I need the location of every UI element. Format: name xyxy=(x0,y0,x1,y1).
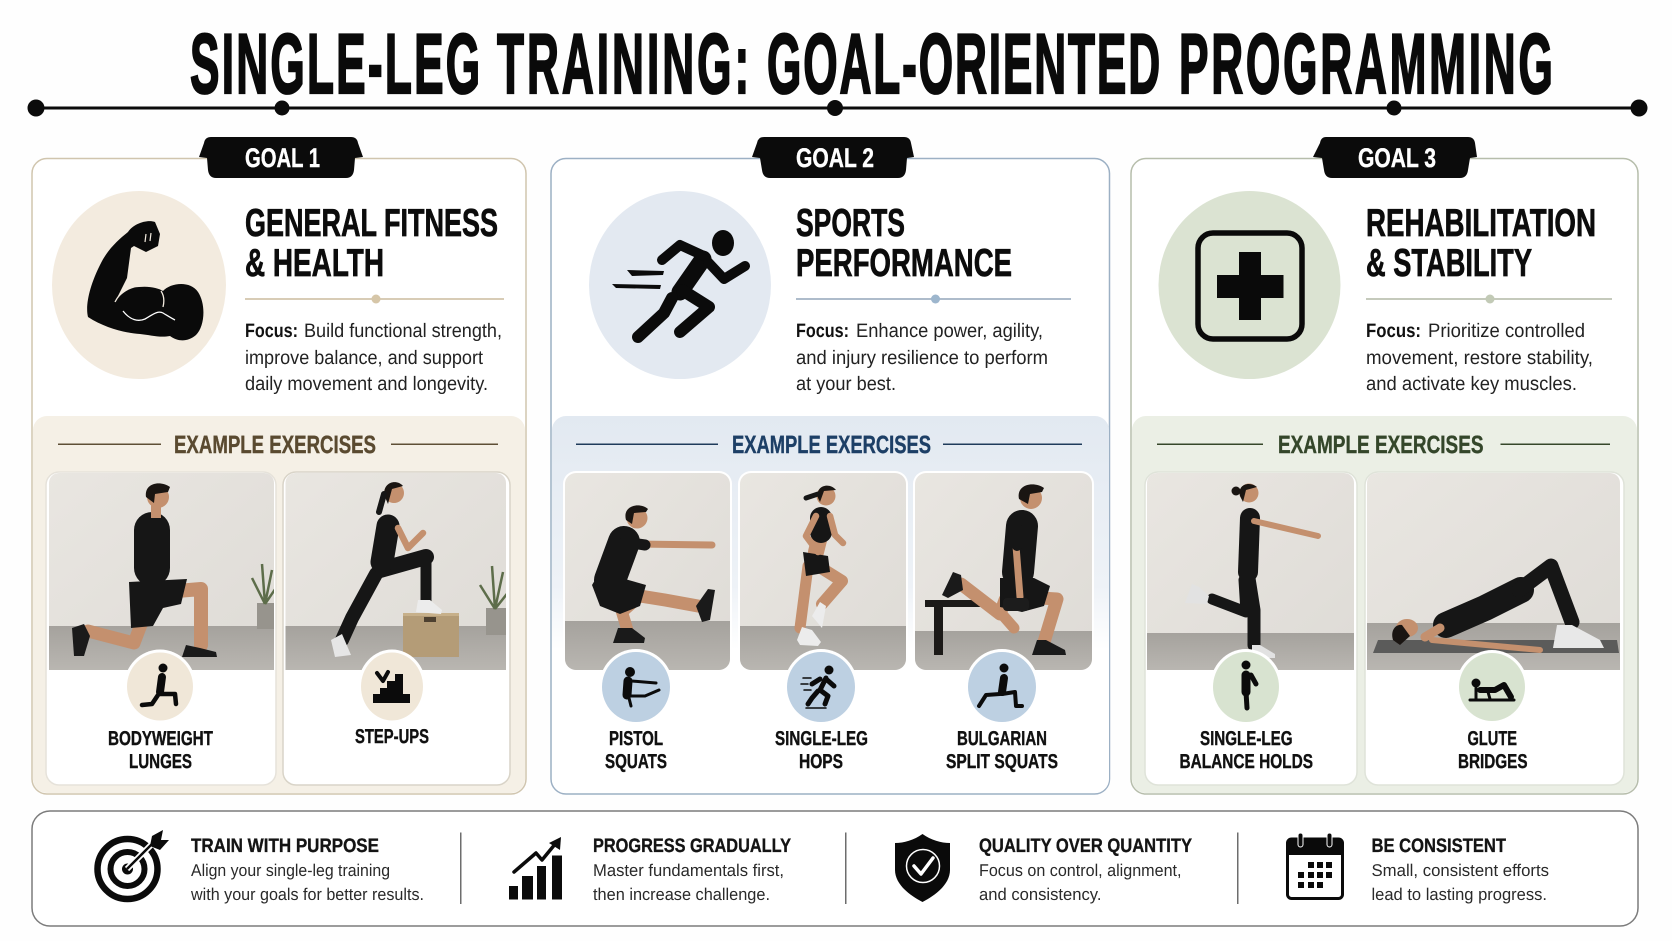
label: glute bridges: BRIDGES xyxy=(1458,751,1528,773)
photo: lunges xyxy=(49,472,278,670)
text: progress gradually: PROGRESS GRADUALLY xyxy=(593,835,791,857)
icon circle: muscle xyxy=(52,191,226,379)
focus text 1: Build functional strength, xyxy=(304,320,502,342)
heading 2: SPORTS xyxy=(796,202,905,245)
text: be consistent: lead to lasting progress. xyxy=(1372,885,1547,904)
focus text 3: movement, restore stability, xyxy=(1366,347,1593,369)
focus text 1: improve balance, and support xyxy=(245,347,484,369)
exercises background 3 xyxy=(1132,416,1637,793)
label: pistol squats xyxy=(605,728,667,773)
label: single-leg hops: SINGLE-LEG xyxy=(775,728,868,750)
goal 2 tab xyxy=(752,137,914,178)
badge: balance xyxy=(1210,649,1282,725)
photo: step-ups xyxy=(285,472,510,670)
text: train with purpose: TRAIN WITH PURPOSE xyxy=(191,835,379,857)
text: be consistent xyxy=(1372,835,1549,904)
icon circle: runner xyxy=(589,191,771,379)
divider 1 xyxy=(245,294,504,304)
badge: bridge xyxy=(1456,650,1528,724)
card: single-leg balance holds xyxy=(1145,472,1357,785)
text: progress gradually: then increase challenge. xyxy=(593,885,770,904)
label: bodyweight lunges: LUNGES xyxy=(129,751,192,773)
card: glute bridges xyxy=(1365,472,1624,785)
label: bulgarian split squats xyxy=(946,728,1058,773)
photo: hops xyxy=(740,472,906,670)
title: PROGRAMMING xyxy=(1179,17,1553,112)
example exercises heading 1: EXAMPLE EXERCISES xyxy=(174,431,376,459)
label: step-ups: STEP-UPS xyxy=(355,726,429,748)
label: bodyweight lunges xyxy=(108,728,213,773)
focus text 1: daily movement and longevity. xyxy=(245,373,488,395)
title xyxy=(190,17,1553,112)
card: step-ups xyxy=(283,472,510,785)
focus text 2: Focus: xyxy=(796,320,849,342)
heading 1: GENERAL FITNESS xyxy=(245,202,498,245)
label: bulgarian split squats: BULGARIAN xyxy=(957,728,1047,750)
label: single-leg hops xyxy=(775,728,868,773)
panel: goal 1 general fitness xyxy=(32,137,526,794)
focus text 1 xyxy=(245,320,502,395)
goal 3 tab xyxy=(1313,137,1477,178)
tip: train with purpose xyxy=(98,830,424,904)
icon: target xyxy=(98,830,169,899)
badge: bulgarian xyxy=(965,649,1039,725)
divider 2 xyxy=(796,294,1071,304)
text: quality over quantity: QUALITY OVER QUANTITY xyxy=(979,835,1192,857)
card: bulgarian split squats xyxy=(913,471,1094,773)
focus text 3: and activate key muscles. xyxy=(1366,373,1577,395)
goal 1 tab xyxy=(199,137,363,178)
focus text 2: Enhance power, agility, xyxy=(856,320,1043,342)
text: train with purpose: Align your single-leg training xyxy=(191,861,390,880)
label: glute bridges xyxy=(1458,728,1528,773)
tip: quality over quantity xyxy=(895,834,1192,904)
goal 3 tab: GOAL 3 xyxy=(1358,143,1436,173)
focus text 2: and injury resilience to perform xyxy=(796,347,1048,369)
text: quality over quantity: Focus on control, alignment, xyxy=(979,861,1182,880)
text: progress gradually xyxy=(593,835,791,904)
focus text 3: Prioritize controlled xyxy=(1428,320,1585,342)
example exercises heading 3: EXAMPLE EXERCISES xyxy=(1278,431,1484,459)
heading 1 xyxy=(245,202,498,285)
divider 3 xyxy=(1366,294,1612,304)
text: be consistent: Small, consistent efforts xyxy=(1372,861,1549,880)
heading 2: PERFORMANCE xyxy=(796,242,1012,285)
label: bodyweight lunges: BODYWEIGHT xyxy=(108,728,213,750)
icon circle: medical cross xyxy=(1158,191,1340,379)
card: bodyweight lunges xyxy=(46,472,278,785)
exercises background 1 xyxy=(33,416,525,793)
label: single-leg balance holds: SINGLE-LEG xyxy=(1200,728,1292,750)
focus text 2 xyxy=(796,320,1048,395)
text: train with purpose: with your goals for better results. xyxy=(190,885,424,904)
photo: pistol squat xyxy=(565,472,730,670)
icon: shield check xyxy=(895,834,950,902)
icon: growth chart xyxy=(509,837,562,900)
card: pistol squats xyxy=(563,471,732,773)
focus text 3 xyxy=(1366,320,1593,395)
heading 1: & HEALTH xyxy=(245,242,384,285)
heading 3 xyxy=(1366,202,1596,285)
label: glute bridges: GLUTE xyxy=(1468,728,1517,750)
heading 3: & STABILITY xyxy=(1366,242,1532,285)
text: be consistent: BE CONSISTENT xyxy=(1372,835,1506,857)
icon: calendar xyxy=(1287,833,1343,898)
tip: progress gradually xyxy=(509,835,791,904)
badge: hops xyxy=(784,649,858,725)
focus text 2: at your best. xyxy=(796,373,896,395)
label: single-leg balance holds xyxy=(1180,728,1313,773)
panel: goal 2 sports performance xyxy=(551,137,1110,794)
photo: glute bridge xyxy=(1367,472,1620,670)
goal 1 tab: GOAL 1 xyxy=(245,143,320,173)
badge: lunges xyxy=(124,650,196,724)
text: progress gradually: Master fundamentals first, xyxy=(593,861,784,880)
text: train with purpose xyxy=(190,835,424,904)
focus text 3: Focus: xyxy=(1366,320,1421,342)
goal 2 tab: GOAL 2 xyxy=(796,143,874,173)
text: quality over quantity xyxy=(979,835,1192,904)
badge: step-ups xyxy=(358,650,426,724)
photo: bulgarian xyxy=(915,472,1092,670)
panel: bottom tips xyxy=(32,811,1638,926)
label: single-leg hops: HOPS xyxy=(799,751,843,773)
title: SINGLE-LEG xyxy=(190,17,480,112)
label: pistol squats: PISTOL xyxy=(609,728,663,750)
label: bulgarian split squats: SPLIT SQUATS xyxy=(946,751,1058,773)
tip: be consistent xyxy=(1287,833,1549,904)
focus text 1: Focus: xyxy=(245,320,298,342)
photo: balance hold xyxy=(1147,472,1354,670)
title rule with dots xyxy=(28,100,1648,116)
text: quality over quantity: and consistency. xyxy=(979,885,1102,904)
title: TRAINING: xyxy=(497,17,749,112)
badge: pistol xyxy=(599,649,673,725)
panel: goal 3 rehabilitation xyxy=(1131,137,1638,794)
heading 2 xyxy=(796,202,1012,285)
label: single-leg balance holds: BALANCE HOLDS xyxy=(1180,751,1313,773)
title: GOAL-ORIENTED xyxy=(767,17,1160,112)
example exercises heading 2: EXAMPLE EXERCISES xyxy=(732,431,931,459)
label: pistol squats: SQUATS xyxy=(605,751,667,773)
card: single-leg hops xyxy=(738,471,908,773)
exercises background 2 xyxy=(552,416,1109,793)
